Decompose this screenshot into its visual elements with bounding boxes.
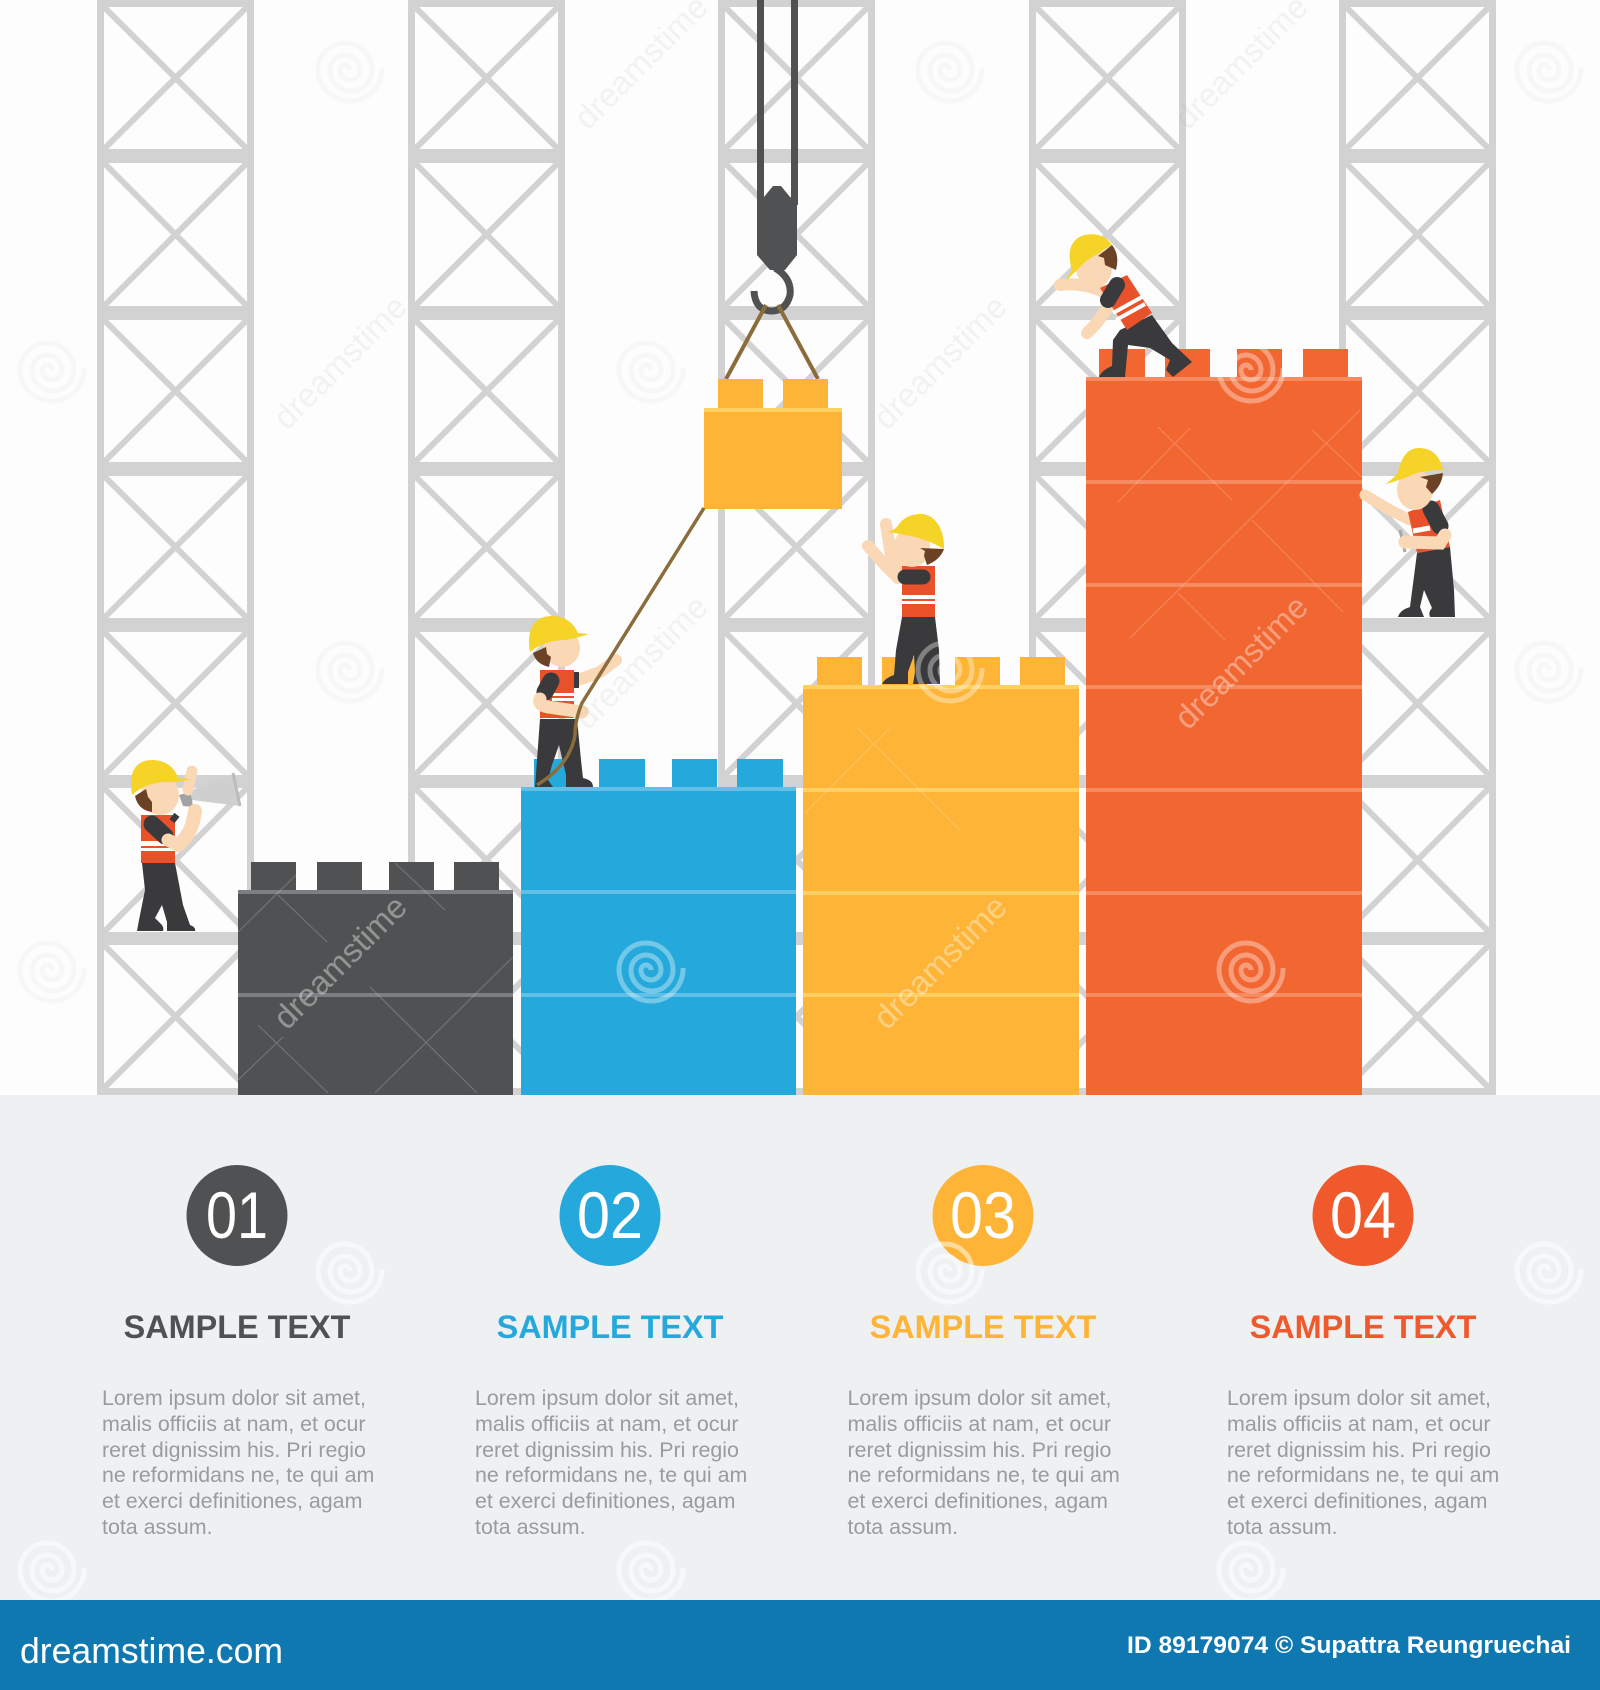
step 01 body text: Lorem ipsum dolor sit amet,	[102, 1386, 366, 1410]
watermark wordmarks: dreamstime	[1167, 588, 1315, 736]
watermark wordmarks: dreamstime	[567, 588, 715, 736]
step 02 body text: reret dignissim his. Pri regio	[475, 1438, 739, 1462]
step 03 body text: et exerci definitiones, agam	[848, 1489, 1108, 1513]
step 01 number badge	[186, 1165, 288, 1266]
step 04 number badge	[1312, 1165, 1414, 1266]
step 01 body text: ne reformidans ne, te qui am	[102, 1463, 374, 1487]
scaffold tower 4	[1029, 0, 1186, 1095]
worker 3: waving	[868, 514, 944, 684]
crane cables and hook	[754, 0, 798, 311]
step 04 body text: ne reformidans ne, te qui am	[1227, 1463, 1499, 1487]
step 03 body text: malis officiis at nam, et ocur	[848, 1412, 1111, 1436]
step 01 heading: SAMPLE TEXT	[124, 1309, 351, 1345]
bottom info panel background	[0, 1095, 1600, 1600]
step 03 body text: tota assum.	[848, 1515, 958, 1539]
step 01 body text: malis officiis at nam, et ocur	[102, 1412, 366, 1436]
step 02 number badge: 02	[577, 1178, 643, 1252]
bar 03: yellow bricks	[803, 657, 1079, 1095]
hanging yellow brick with slings	[704, 305, 842, 509]
step 04 body text: reret dignissim his. Pri regio	[1227, 1438, 1491, 1462]
footer bar	[0, 1600, 1600, 1690]
worker 5: with wrench beside orange bar	[1365, 448, 1455, 617]
watermark wordmarks	[266, 0, 1315, 1036]
step 04 body text: malis officiis at nam, et ocur	[1227, 1412, 1491, 1436]
worker 1: megaphone	[131, 760, 240, 931]
scaffold tower 5	[1339, 0, 1496, 1095]
step 03 number badge	[932, 1165, 1034, 1266]
scaffold tower 2	[408, 0, 565, 1095]
watermark wordmarks: dreamstime	[866, 288, 1014, 436]
scaffold tower 1	[97, 0, 254, 1095]
step 02 body text: ne reformidans ne, te qui am	[475, 1463, 747, 1487]
footer logo: dreamstime.com	[20, 1630, 283, 1671]
step 02 body text: malis officiis at nam, et ocur	[475, 1412, 739, 1436]
step 03 body text: ne reformidans ne, te qui am	[848, 1463, 1120, 1487]
step 02 body text: tota assum.	[475, 1515, 586, 1539]
step 01 body text: tota assum.	[102, 1515, 213, 1539]
step 04 number badge: 04	[1330, 1178, 1396, 1252]
step 03 body text: Lorem ipsum dolor sit amet,	[848, 1386, 1111, 1410]
scaffold tower 3	[718, 0, 875, 1095]
step 04 body text: Lorem ipsum dolor sit amet,	[1227, 1386, 1491, 1410]
watermark wordmarks: dreamstime	[266, 288, 414, 436]
step 04 body text: tota assum.	[1227, 1515, 1338, 1539]
step 01 number badge: 01	[206, 1178, 268, 1252]
step 02 number badge	[560, 1165, 660, 1266]
worker 2: pulling rope	[529, 616, 616, 787]
bar 04: orange bricks	[1086, 349, 1362, 1095]
step 03 heading: SAMPLE TEXT	[870, 1309, 1097, 1345]
step 03 number badge: 03	[950, 1178, 1016, 1252]
watermark lattice lines	[238, 410, 1362, 1093]
step 04 heading: SAMPLE TEXT	[1250, 1309, 1477, 1345]
step 02 body text: et exerci definitiones, agam	[475, 1489, 735, 1513]
watermark wordmarks: dreamstime	[266, 888, 414, 1036]
step 03 body text: reret dignissim his. Pri regio	[848, 1438, 1111, 1462]
bar 02: blue bricks	[521, 759, 796, 1095]
tag rope from brick to worker	[537, 508, 704, 785]
step 01 body text: reret dignissim his. Pri regio	[102, 1438, 366, 1462]
footer credit: ID 89179074 © Supattra Reungruechai	[1127, 1632, 1571, 1659]
step 02 body text: Lorem ipsum dolor sit amet,	[475, 1386, 739, 1410]
step 04 body text: et exerci definitiones, agam	[1227, 1489, 1487, 1513]
worker 4: pushing on top of orange bar	[1060, 234, 1192, 377]
step 01 body text: et exerci definitiones, agam	[102, 1489, 362, 1513]
step 02 heading: SAMPLE TEXT	[497, 1309, 724, 1345]
bar 01: dark bricks	[238, 862, 513, 1095]
watermark wordmarks: dreamstime	[866, 888, 1014, 1036]
